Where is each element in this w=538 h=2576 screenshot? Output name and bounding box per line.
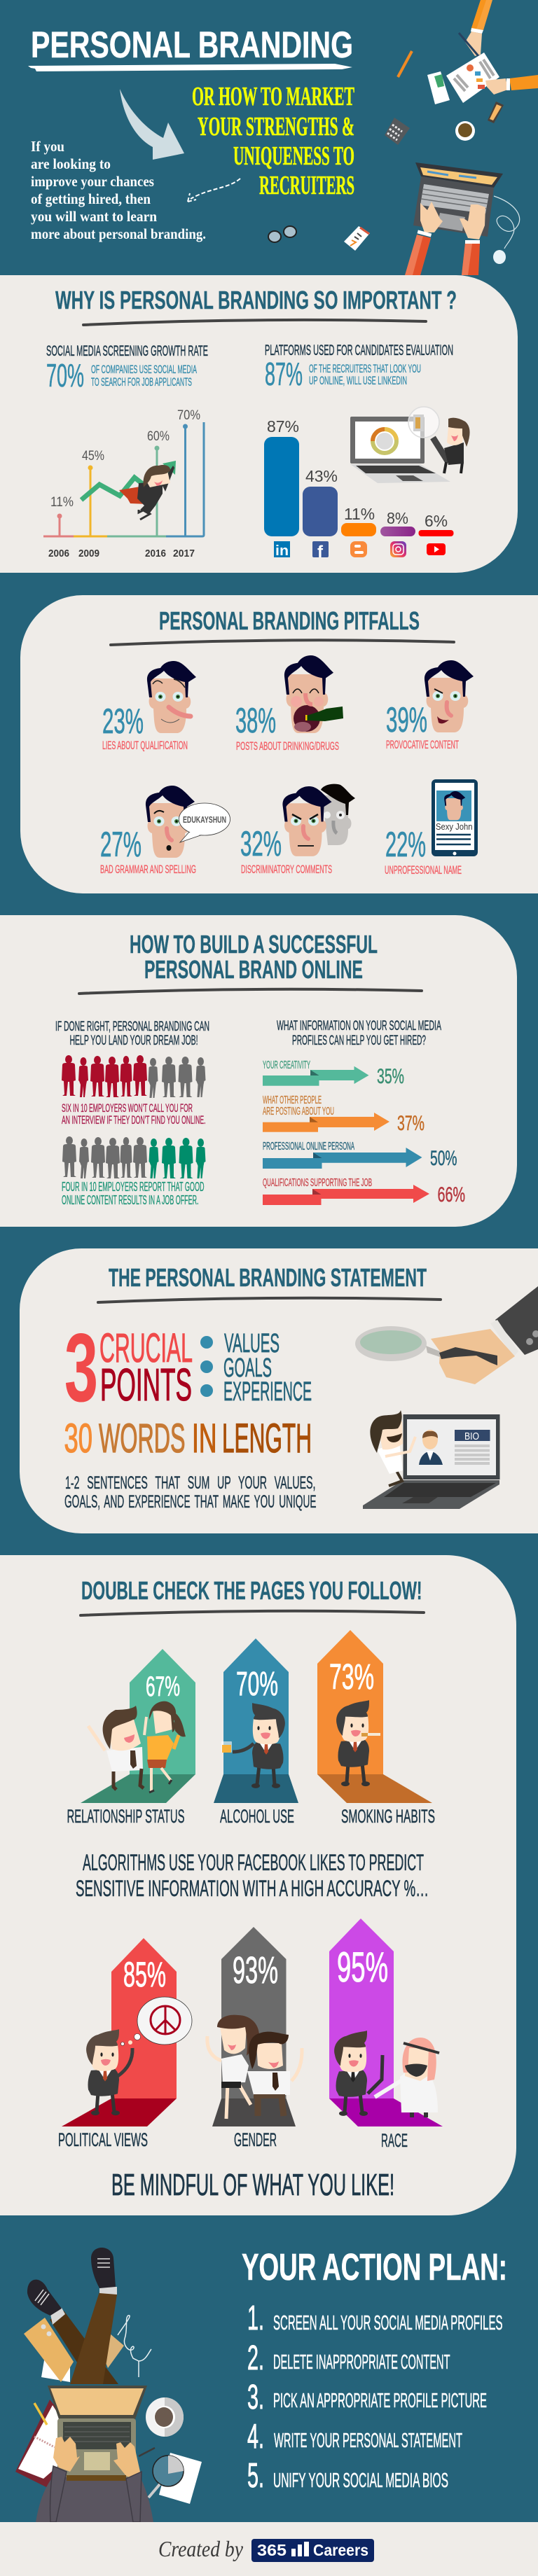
logo: 365 Careers: 365 [257, 2541, 287, 2559]
right subhead: PROFILES CAN HELP YOU GET HIRED? [292, 1033, 426, 1048]
icon: woman and man [207, 2015, 302, 2119]
left subhead: SOCIAL MEDIA SCREENING GROWTH RATE [46, 343, 208, 359]
icon: instagram [390, 541, 406, 557]
icon: calculator [385, 118, 410, 145]
arrow: political views [62, 1938, 192, 2126]
icon: laptop with BIO: BIO [464, 1430, 479, 1442]
arrow stat: other people: WHAT OTHER PEOPLE [263, 1094, 322, 1106]
arrow stat: other people: ARE POSTING ABOUT YOU [263, 1106, 334, 1118]
header section [28, 0, 538, 275]
stat 87% caption [309, 362, 421, 387]
panel: why is personal branding important [0, 275, 518, 573]
pitfall: provocative [386, 660, 474, 751]
definition text [64, 1473, 317, 1512]
arrow stat: professional persona: PROFESSIONAL ONLINE PERSONA [263, 1141, 354, 1153]
caption: four in ten: FOUR IN 10 EMPLOYERS REPORT THAT GOOD [62, 1180, 205, 1194]
icon: laptop with typing hands [405, 162, 503, 275]
stat 70% caption [91, 363, 197, 389]
arrow: relationship status [81, 1649, 195, 1803]
arrow: smoking habits: 73% [329, 1657, 374, 1697]
icon: chalk arrow [120, 89, 184, 160]
icon: person in suit [36, 2466, 153, 2522]
pitfall: unprofessional name: 22% [385, 825, 426, 864]
intro text: you will want to learn [31, 208, 157, 225]
action list [247, 2299, 503, 2495]
stat 70% caption: TO SEARCH FOR JOB APPLICANTS [91, 375, 192, 389]
action list: 3. [247, 2379, 264, 2416]
underline [111, 640, 454, 645]
pitfall: grammar: BAD GRAMMAR AND SPELLING [100, 863, 196, 876]
icon: laptop with BIO [363, 1414, 500, 1509]
icon: facebook [312, 541, 329, 562]
30 words in length: LENGTH [222, 1416, 312, 1461]
pitfall: discriminatory: DISCRIMINATORY COMMENTS [241, 863, 332, 876]
icon: coffee cup [455, 121, 475, 141]
pitfall: grammar: EDUKAYSHUN [183, 814, 226, 825]
icon: man smoking [336, 1700, 380, 1786]
growth chart: 2017 [173, 548, 195, 559]
label: alcohol use: ALCOHOL USE [220, 1806, 294, 1827]
icon: phone [488, 102, 504, 123]
caption: six in ten: AN INTERVIEW IF THEY DON'T FIND YOU ONLINE. [62, 1113, 206, 1127]
pitfall: grammar: 27% [100, 825, 142, 864]
arrow stat: creativity: 35% [377, 1065, 404, 1088]
bar chart: platforms: 11% [344, 505, 375, 523]
icon: businessman [334, 2031, 382, 2116]
label: political views: POLITICAL VIEWS [58, 2129, 148, 2150]
pitfall: drinking: 38% [235, 701, 276, 740]
label: gender: GENDER [234, 2129, 277, 2150]
pitfall: grammar [100, 786, 230, 876]
caption: six in ten [62, 1101, 206, 1127]
icon: envelope and papers [24, 2318, 124, 2382]
bar chart: platforms: 8% [387, 509, 408, 527]
3 crucial points: CRUCIAL [99, 1325, 193, 1371]
stat 87% caption: OF THE RECRUITERS THAT LOOK YOU [309, 362, 421, 375]
growth chart: 60% [147, 429, 170, 444]
bar chart: platforms: 6% [425, 512, 448, 530]
icon: man in traditional dress [375, 2038, 439, 2117]
icon: right hand with sleeve [485, 75, 538, 95]
3 crucial points: POINTS [100, 1359, 192, 1410]
label: relationship status: RELATIONSHIP STATUS [67, 1806, 185, 1827]
definition text: GOALS, AND EXPERIENCE THAT MAKE YOU UNIQUE [64, 1492, 317, 1512]
icon: typing hands [53, 2437, 140, 2479]
icon: pointing man [370, 1410, 415, 1486]
stat 70%: 70% [46, 357, 84, 394]
30 words in length: IN [192, 1416, 217, 1461]
pitfall: discriminatory: 32% [240, 824, 282, 863]
arrow stat: creativity [263, 1059, 404, 1088]
arrow: race: 95% [337, 1944, 388, 1991]
icon: paper and magnifier [149, 2453, 202, 2504]
people row: four in ten [62, 1136, 206, 1178]
caption: six in ten: SIX IN 10 EMPLOYERS WON'T CALL YOU FOR [62, 1101, 193, 1115]
underline [79, 989, 422, 994]
icon: mouse and cable [493, 196, 520, 264]
action list: 4. [247, 2418, 264, 2456]
yellow subtitle: OR HOW TO MARKET [192, 82, 354, 111]
icon: notebook and pencil [15, 2400, 63, 2487]
bar chart: platforms: 43% [305, 467, 338, 485]
pitfall: lies: LIES ABOUT QUALIFICATION [102, 739, 188, 752]
left subhead [55, 1019, 209, 1048]
icon: youtube [427, 543, 446, 555]
bar chart: platforms [264, 417, 454, 536]
intro text [31, 138, 206, 242]
icon: dashed arrow [188, 179, 240, 202]
icon: pen [139, 2448, 155, 2456]
icon: couple [88, 1701, 186, 1792]
stat 87%: 87% [265, 356, 303, 392]
bar chart: platforms: 87% [267, 417, 299, 436]
growth chart: 11% [50, 495, 74, 510]
created by: Created by [158, 2536, 244, 2561]
3 crucial points: EXPERIENCE [223, 1377, 312, 1407]
arrow stat: qualifications: 66% [437, 1183, 465, 1206]
panel: double check the pages you follow [0, 1555, 516, 2215]
heading: PERSONAL BRAND ONLINE [144, 955, 363, 984]
icon: laptop from above [48, 2386, 147, 2477]
arrow: alcohol use [214, 1638, 298, 1803]
panel: how to build a brand online [0, 915, 517, 1227]
people row: six in ten [62, 1055, 206, 1098]
underline [81, 1611, 424, 1615]
growth chart: 70% [177, 408, 200, 423]
panel: personal branding pitfalls [20, 595, 538, 893]
growth chart: 45% [82, 449, 104, 464]
pitfall: drinking [235, 655, 343, 753]
action list: 1. [247, 2299, 264, 2337]
arrow stat: qualifications: QUALIFICATIONS SUPPORTING THE JOB [263, 1177, 372, 1189]
intro text: are looking to [31, 155, 111, 172]
right subhead [277, 1019, 441, 1048]
icon: coffee cup from above [146, 2397, 184, 2437]
panel: personal branding statement [20, 1248, 538, 1533]
intro text: If you [31, 138, 64, 155]
pitfall: provocative: 39% [386, 700, 427, 739]
arrow: gender [207, 1927, 302, 2126]
icon: glasses [268, 226, 296, 242]
caption: four in ten: ONLINE CONTENT RESULTS IN A JOB OFFER. [62, 1193, 199, 1207]
pitfall: unprofessional name: UNPROFESSIONAL NAME [385, 863, 462, 877]
icon: blogger [350, 541, 367, 557]
growth chart [43, 408, 204, 559]
pitfall: discriminatory [240, 784, 355, 876]
logo: 365 Careers: Careers [313, 2541, 368, 2559]
icon: earphones [118, 2316, 151, 2377]
section: your action plan [15, 2246, 507, 2522]
30 words in length: 30 [64, 1416, 92, 1461]
action list: 5. [247, 2457, 264, 2495]
3 crucial points: VALUES [224, 1329, 280, 1358]
pitfall: drinking: POSTS ABOUT DRINKING/DRUGS [236, 739, 339, 753]
arrow stat: professional persona: 50% [430, 1147, 457, 1170]
icon: top hand with pen [459, 0, 492, 56]
3 crucial points: GOALS [223, 1353, 272, 1383]
pitfall: lies: 23% [102, 702, 144, 741]
intro text: of getting hired, then [31, 190, 151, 207]
arrow stat: professional persona [263, 1141, 457, 1170]
pitfall: unprofessional name: Sexy John [436, 821, 472, 832]
definition text: 1-2 SENTENCES THAT SUM UP YOUR VALUES, [65, 1473, 315, 1493]
3 crucial points: 3 [64, 1314, 98, 1422]
left subhead: IF DONE RIGHT, PERSONAL BRANDING CAN [55, 1019, 209, 1034]
stat 70% caption: OF COMPANIES USE SOCIAL MEDIA [91, 363, 197, 376]
intro text: more about personal branding. [31, 225, 206, 242]
growth chart: 2009 [78, 548, 99, 559]
icon: report papers [427, 53, 499, 104]
pitfall: unprofessional name [385, 779, 478, 877]
arrow: race [329, 1919, 443, 2126]
arrow stat: other people: 37% [397, 1112, 425, 1135]
algorithms text [76, 1850, 429, 1901]
underline [98, 1298, 441, 1302]
icon: laptop with analysis man [350, 407, 470, 483]
logo: 365 Careers [251, 2539, 374, 2562]
30 words in length [64, 1416, 312, 1461]
label: race: RACE [381, 2130, 408, 2151]
icon: legs and shoes [27, 2248, 118, 2384]
3 crucial points [64, 1314, 312, 1422]
yellow subtitle: RECRUITERS [259, 171, 354, 200]
icon: thought bubble with peace sign [120, 1997, 192, 2046]
arrow: smoking habits [317, 1630, 432, 1803]
caption: four in ten [62, 1180, 205, 1207]
icon: facebook: f [317, 543, 324, 562]
arrow: gender: 93% [233, 1949, 278, 1991]
growth chart: 2016 [145, 548, 166, 559]
icon: hand with magnifier [355, 1286, 538, 1384]
yellow subtitle: YOUR STRENGTHS & [198, 112, 354, 141]
title: PERSONAL BRANDING [31, 25, 353, 66]
growth chart: 2006 [48, 548, 69, 559]
footer [0, 2522, 538, 2576]
underline [83, 320, 426, 325]
arrow: alcohol use: 70% [236, 1666, 278, 1703]
heading [130, 930, 378, 984]
left subhead: HELP YOU LAND YOUR DREAM JOB! [70, 1033, 198, 1048]
icon: flying businessman with cape [119, 465, 174, 520]
icon: notepad [344, 226, 370, 251]
title brush underline [28, 64, 352, 71]
icon: pencil [398, 51, 412, 77]
icon: man with drink [221, 1703, 285, 1788]
icon: linkedin [274, 541, 290, 559]
action list: 2. [247, 2339, 264, 2377]
heading: HOW TO BUILD A SUCCESSFUL [130, 930, 378, 959]
arrow stat: creativity: YOUR CREATIVITY [263, 1059, 310, 1071]
arrow: political views: 85% [123, 1955, 166, 1994]
pitfall: lies [102, 661, 196, 752]
arrow stat: other people [263, 1094, 425, 1135]
arrow stat: qualifications [263, 1177, 465, 1206]
icon: man thinking [86, 2029, 132, 2115]
yellow subtitle: UNIQUENESS TO [233, 141, 354, 171]
intro text: improve your chances [31, 173, 154, 190]
yellow subtitle [192, 82, 354, 200]
stat 87% caption: UP ONLINE, WILL USE LINKEDIN [309, 374, 407, 387]
pitfall: provocative: PROVOCATIVE CONTENT [386, 738, 459, 751]
icon: linkedin: in [275, 543, 289, 559]
label: smoking habits: SMOKING HABITS [341, 1806, 435, 1827]
30 words in length: WORDS [99, 1416, 185, 1461]
arrow: relationship status: 67% [146, 1671, 180, 1702]
